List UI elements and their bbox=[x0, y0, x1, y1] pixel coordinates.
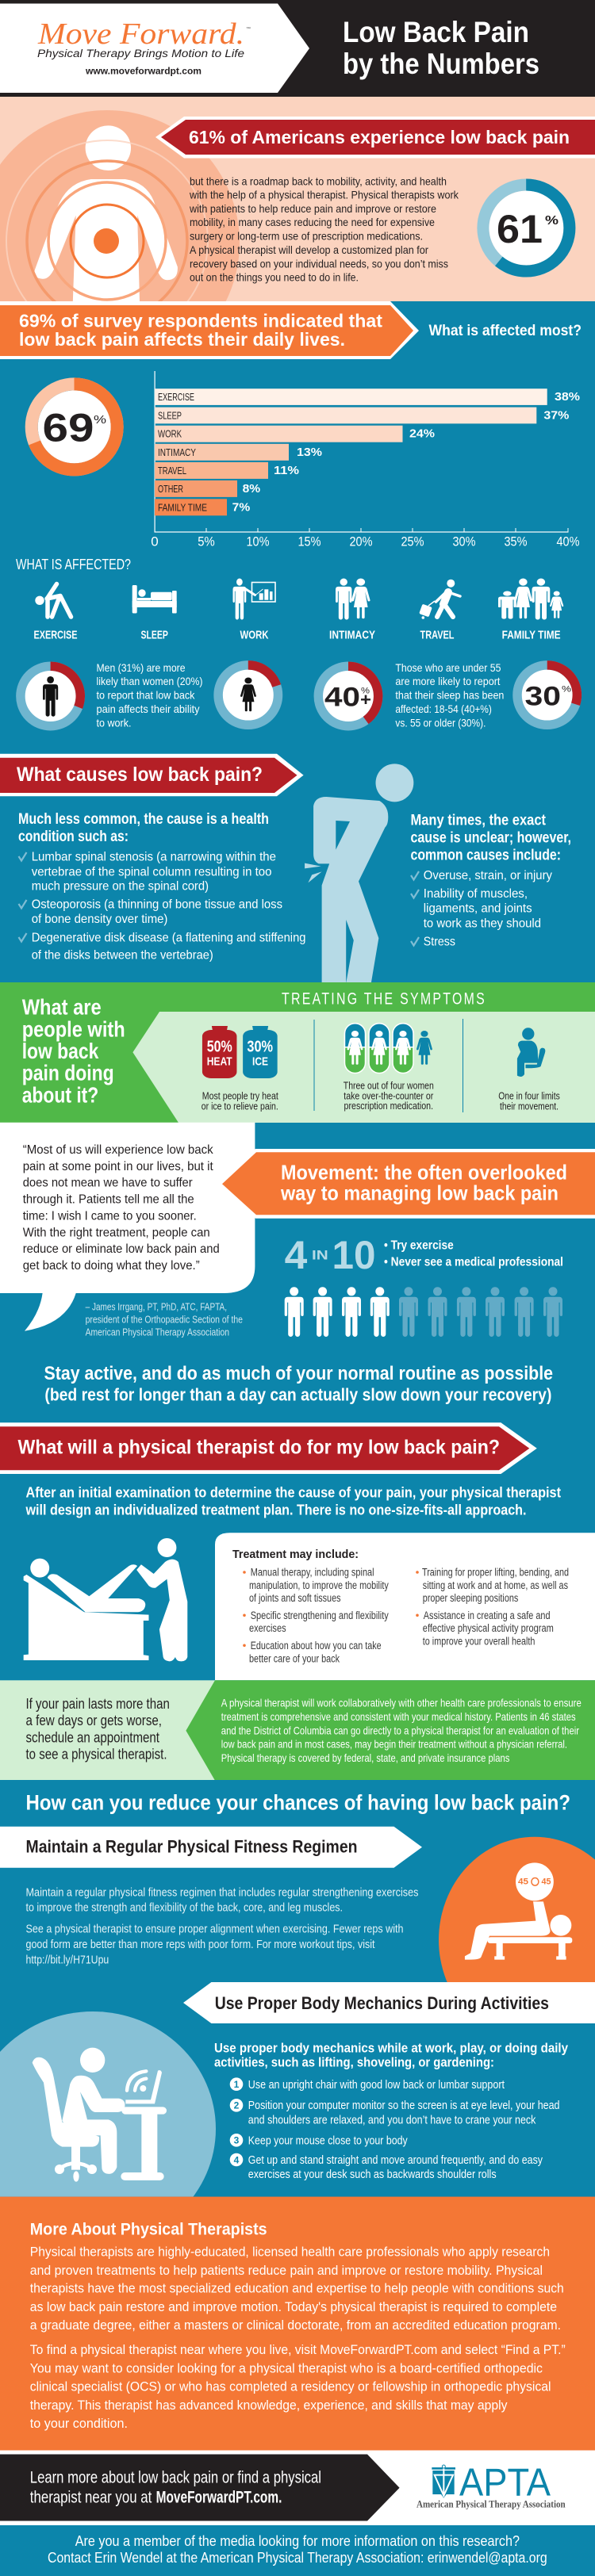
speech bubble bbox=[0, 1123, 255, 1331]
text: men vs women: to work. bbox=[97, 717, 132, 729]
quote text: time: I wish I came to you sooner. bbox=[23, 1209, 197, 1223]
text block: out on the things you need to do in life. bbox=[190, 271, 359, 284]
text: fitness bbox=[25, 1885, 419, 1967]
bar chart: 30% bbox=[452, 534, 476, 549]
footer: Are you a member of the media looking for more information on this research? bbox=[75, 2533, 520, 2549]
heading banner bbox=[217, 1149, 595, 1219]
caption: heat or ice: Most people try heat bbox=[202, 1091, 278, 1102]
icon labels: TRAVEL bbox=[420, 629, 454, 642]
text: age comparison: vs. 55 or older (30%). bbox=[395, 717, 486, 729]
caption: women medication: prescription medication. bbox=[344, 1100, 433, 1112]
text: fitness: See a physical therapist to ensure proper alignment when exercising. Fewer reps with bbox=[25, 1922, 403, 1935]
text: health conditions: much pressure on the spinal cord) bbox=[32, 880, 209, 894]
quote text: “Most of us will experience low back bbox=[23, 1143, 214, 1157]
text: health conditions: Much less common, the cause is a health bbox=[18, 811, 269, 828]
quote text: With the right treatment, people can bbox=[23, 1226, 210, 1239]
icon: bench press: 45 bbox=[518, 1877, 528, 1887]
icon labels: FAMILY TIME bbox=[502, 629, 561, 642]
logo wordmark: Move Forward. bbox=[37, 17, 244, 51]
bar chart: 35% bbox=[505, 534, 527, 549]
text block: therapy. This therapist has advanced knowledge, experience, and skills that may apply bbox=[30, 2398, 508, 2413]
callout: schedule appointment: a few days or gets worse, bbox=[25, 1713, 162, 1728]
text: health conditions: Degenerative disk disease (a flattening and stiffening bbox=[32, 932, 305, 945]
donut chart: 61 percent: % bbox=[545, 214, 559, 228]
text: health conditions: Osteoporosis (a thinning of bone tissue and loss bbox=[32, 898, 282, 912]
icon labels: EXERCISE bbox=[33, 629, 78, 642]
icon labels bbox=[33, 629, 561, 642]
donut: women 20 percent bbox=[218, 665, 278, 725]
text block: and proven treatments to help patients reduce pain and improve or restore mobility. Physical bbox=[30, 2263, 543, 2278]
attribution: president of the Orthopaedic Section of the bbox=[86, 1313, 243, 1325]
caption: heat or ice: or ice to relieve pain. bbox=[202, 1100, 278, 1112]
text block: clinical specialist (OCS) or who has completed a residency or fellowship in orthopedic physical bbox=[30, 2379, 551, 2394]
heading: treating the symptoms: TREATING THE SYMPTOMS bbox=[282, 990, 486, 1009]
text: men vs women: likely than women (20%) bbox=[97, 675, 203, 687]
numbered list: 4 bbox=[234, 2154, 240, 2165]
panel: treatment may include bbox=[215, 1533, 595, 1680]
icon: family time bbox=[498, 579, 563, 619]
title: by the Numbers bbox=[343, 48, 539, 80]
caption: women medication: Three out of four women bbox=[344, 1080, 434, 1091]
icon: work bbox=[233, 579, 275, 619]
icon: travel bbox=[419, 580, 460, 619]
bar chart: 20% bbox=[349, 534, 373, 549]
panel: treatment may include: Assistance in creating a safe and bbox=[424, 1610, 551, 1621]
caption: limits movement: their movement. bbox=[500, 1100, 559, 1112]
callout: schedule appointment: schedule an appointment bbox=[25, 1729, 159, 1745]
panel: treatment may include: to improve your overall health bbox=[423, 1635, 535, 1647]
bar chart: 0 bbox=[151, 534, 159, 549]
heading banner bbox=[155, 117, 595, 159]
bar chart: INTIMACY bbox=[158, 447, 197, 458]
website: www.moveforwardpt.com bbox=[85, 66, 202, 77]
text block: surgery or long-term use of prescription medications. bbox=[190, 230, 423, 243]
icon: heat and ice bottles: HEAT bbox=[207, 1055, 232, 1068]
bar chart: 40% bbox=[557, 534, 579, 549]
statistic: 4 in 10: IN bbox=[312, 1247, 328, 1262]
panel: more about physical therapists bbox=[0, 2197, 595, 2451]
icon: person at desk bbox=[0, 2011, 216, 2196]
bullet list: • Try exercise bbox=[384, 1239, 454, 1253]
APTA logo: American Physical Therapy Association bbox=[416, 2498, 566, 2510]
caption: limits movement bbox=[498, 1091, 560, 1112]
bar chart: 10% bbox=[246, 534, 270, 549]
panel: treatment may include: Treatment may include: bbox=[232, 1548, 359, 1561]
text: age comparison: that their sleep has been bbox=[395, 688, 504, 701]
trademark: ™ bbox=[246, 26, 251, 32]
heading: More About Physical Therapists bbox=[30, 2220, 267, 2239]
donut chart: 61 percent: 61 bbox=[497, 207, 543, 251]
title: Low Back Pain bbox=[343, 16, 529, 48]
advice text bbox=[44, 1363, 553, 1405]
heading banner bbox=[0, 754, 304, 796]
text block: with the help of a physical therapist. Physical therapists work bbox=[189, 189, 459, 201]
bar chart: 11% bbox=[274, 464, 299, 477]
donut chart: 69 percent bbox=[32, 384, 117, 469]
bar chart: TRAVEL bbox=[158, 465, 186, 477]
black arrow: therapist near you at bbox=[30, 2488, 152, 2506]
text block: a graduate degree, either a masters or clinical doctorate, from an accredited education program. bbox=[30, 2318, 561, 2333]
text block: You may want to consider looking for a physical therapist who is a board-certified orthopedic bbox=[30, 2360, 543, 2375]
panel: 61 percent bbox=[0, 97, 595, 301]
quote text: pain at some point in our lives, but it bbox=[23, 1160, 213, 1173]
donut: 40 plus percent: % bbox=[361, 687, 370, 696]
numbered list: 1 bbox=[234, 2079, 240, 2090]
bar chart: 7% bbox=[232, 500, 250, 514]
panel: treatment may include: Manual therapy, including spinal bbox=[251, 1567, 374, 1579]
caption: heat or ice bbox=[202, 1091, 278, 1112]
icon: sleep bbox=[132, 585, 177, 614]
panel: treatment may include: manipulation, to improve the mobility bbox=[249, 1579, 389, 1591]
panel: daily life impact bbox=[0, 301, 582, 729]
heading banner: 69% of survey respondents indicated that bbox=[19, 311, 382, 331]
text block: A physical therapist will develop a customized plan for bbox=[190, 243, 428, 256]
light panel bbox=[132, 1012, 595, 1123]
quote text: does not mean we have to suffer bbox=[23, 1177, 193, 1190]
text: fitness: to improve the strength and flexibility of the back, core, and leg muscles. bbox=[25, 1901, 343, 1915]
text block: as low back pain restore and improve motion. Today's physical therapist is required to complete bbox=[30, 2299, 557, 2314]
panel: what people are doing bbox=[0, 982, 595, 1123]
callout: direct access: Physical therapy is covered by federal, state, and private insurance plans bbox=[221, 1751, 509, 1764]
heading banner bbox=[0, 1422, 537, 1474]
bar chart: SLEEP bbox=[158, 410, 182, 421]
logo panel bbox=[0, 3, 309, 93]
text: body mechanics intro: activities, such as lifting, shoveling, or gardening: bbox=[214, 2055, 494, 2070]
icon: person bent with back pain bbox=[305, 764, 413, 983]
statistic: 4 in 10: 10 bbox=[332, 1233, 376, 1277]
text block: with patients to help reduce pain and improve or restore bbox=[189, 202, 436, 215]
statistic: 4 in 10: 4 bbox=[285, 1233, 308, 1277]
donut chart: 61 percent bbox=[483, 185, 570, 271]
bar chart: 37% bbox=[543, 408, 569, 422]
text block: therapists have the most specialized education and expertise to help people with conditions such bbox=[30, 2281, 564, 2296]
icon: seated person bbox=[517, 1028, 545, 1077]
icon: bench press bbox=[439, 1836, 595, 1982]
numbered list: Keep your mouse close to your body bbox=[248, 2134, 408, 2147]
text: men vs women: Men (31%) are more bbox=[97, 661, 186, 674]
text: health conditions: of the disks between the vertebrae) bbox=[32, 948, 213, 962]
sub-heading banner: body mechanics bbox=[183, 1982, 595, 2023]
bar chart: 5% bbox=[198, 534, 215, 549]
panel: treatment may include: better care of your back bbox=[249, 1652, 340, 1664]
text: fitness: good form are better than more reps with poor form. For more workout tips, visit bbox=[25, 1938, 375, 1951]
donut chart: 69 percent: % bbox=[94, 413, 106, 427]
heading: what are people doing bbox=[22, 994, 125, 1108]
bar chart: 13% bbox=[297, 446, 322, 459]
tagline: Physical Therapy Brings Motion to Life bbox=[37, 48, 244, 59]
panel: quote bbox=[0, 1123, 255, 1338]
icon: body with pain rings bbox=[0, 110, 240, 301]
text: age comparison: Those who are under 55 bbox=[395, 661, 501, 674]
text: age comparison: are more likely to report bbox=[395, 675, 500, 687]
text: fitness: http://bit.ly/H71Upu bbox=[25, 1954, 109, 1967]
text: common causes: to work as they should bbox=[424, 917, 541, 930]
panel: call to action bbox=[0, 2450, 595, 2525]
caption: limits movement: One in four limits bbox=[498, 1091, 560, 1102]
icon labels: INTIMACY bbox=[329, 629, 375, 642]
heading: what are people doing: low back bbox=[22, 1039, 99, 1063]
footer bbox=[48, 2533, 547, 2566]
heading banner: What causes low back pain? bbox=[17, 764, 263, 786]
callout: direct access bbox=[186, 1680, 595, 1780]
heading: what is affected: WHAT IS AFFECTED? bbox=[16, 557, 131, 572]
bar chart: OTHER bbox=[158, 484, 183, 495]
donut chart: 69 percent: 69 bbox=[43, 406, 94, 450]
bar chart: 25% bbox=[401, 534, 424, 549]
panel: movement bbox=[44, 1149, 595, 1405]
numbered list: 3 bbox=[234, 2135, 240, 2146]
numbered list: exercises at your desk such as backwards shoulder rolls bbox=[248, 2168, 497, 2181]
callout: schedule appointment bbox=[0, 1680, 216, 1780]
black arrow bbox=[0, 2455, 400, 2521]
text: health conditions: vertebrae of the spinal column resulting in too bbox=[32, 865, 272, 878]
heading banner: low back pain affects their daily lives. bbox=[19, 329, 345, 350]
text: men vs women bbox=[97, 661, 203, 729]
text block: to your condition. bbox=[30, 2416, 128, 2431]
callout: schedule appointment: to see a physical therapist. bbox=[25, 1747, 167, 1763]
quote text: reduce or eliminate low back pain and bbox=[23, 1242, 220, 1256]
text block: Physical therapists are highly-educated, licensed health care professionals who apply research bbox=[30, 2244, 550, 2260]
text: common causes: Overuse, strain, or injury bbox=[424, 869, 552, 882]
attribution: – James Irrgang, PT, PhD, ATC, FAPTA, bbox=[86, 1300, 227, 1312]
heading banner bbox=[0, 301, 419, 359]
icon: exercise bbox=[35, 584, 71, 617]
heading banner: What will a physical therapist do for my low back pain? bbox=[17, 1436, 500, 1458]
title bbox=[343, 16, 539, 80]
heading banner: way to managing low back pain bbox=[280, 1181, 559, 1204]
intro text: will design an individualized treatment plan. There is no one-size-fits-all approach. bbox=[25, 1502, 526, 1518]
pictogram: 4 of 10 people bbox=[285, 1287, 562, 1337]
numbered list bbox=[230, 2077, 560, 2181]
text: health conditions bbox=[18, 811, 306, 962]
bar chart: 15% bbox=[298, 534, 321, 549]
sub-heading banner: body mechanics: Use Proper Body Mechanics During Activities bbox=[215, 1993, 549, 2013]
text: age comparison bbox=[395, 661, 504, 729]
donut: 30 percent: 30 bbox=[525, 682, 561, 712]
donut: 30 percent bbox=[517, 665, 577, 725]
icon: heat and ice bottles bbox=[202, 1026, 278, 1078]
text: common causes: Stress bbox=[424, 935, 455, 948]
text block bbox=[189, 174, 459, 284]
text: health conditions: condition such as: bbox=[18, 829, 129, 845]
text block: mobility, in many cases reducing the need for expensive bbox=[190, 216, 435, 228]
text: men vs women: pain affects their ability bbox=[97, 702, 200, 715]
panel: what will a physical therapist do bbox=[0, 1422, 595, 1780]
icon labels: WORK bbox=[240, 629, 269, 642]
donut: 40 plus percent: + bbox=[360, 690, 371, 710]
panel: treatment may include: of joints and soft tissues bbox=[249, 1592, 341, 1604]
icon: heat and ice bottles: ICE bbox=[252, 1055, 268, 1068]
text: common causes: common causes include: bbox=[411, 847, 561, 863]
sub-heading banner: fitness: Maintain a Regular Physical Fitness Regimen bbox=[25, 1837, 357, 1857]
caption: women medication bbox=[344, 1080, 434, 1112]
icon: heat and ice bottles: 30% bbox=[247, 1039, 273, 1056]
icon labels: SLEEP bbox=[141, 629, 168, 642]
icon: heat and ice bottles: 50% bbox=[207, 1039, 232, 1056]
bar chart: 8% bbox=[243, 482, 260, 496]
APTA logo bbox=[416, 2462, 566, 2510]
intro text bbox=[25, 1484, 561, 1518]
statistic: 4 in 10 bbox=[285, 1233, 376, 1277]
attribution bbox=[86, 1300, 243, 1338]
icon: intimacy bbox=[336, 579, 370, 619]
numbered list: 2 bbox=[234, 2100, 240, 2111]
callout: schedule appointment: If your pain lasts more than bbox=[25, 1696, 170, 1712]
text: common causes bbox=[411, 813, 571, 948]
panel: treatment may include: effective physical activity program bbox=[423, 1622, 554, 1634]
heading: what are people doing: pain doing bbox=[22, 1061, 114, 1085]
panel: what causes low back pain bbox=[0, 754, 571, 983]
APTA logo: APTA bbox=[459, 2462, 551, 2505]
text: body mechanics intro bbox=[214, 2040, 568, 2070]
text block bbox=[30, 2244, 566, 2431]
icon: three of four women bbox=[344, 1024, 432, 1074]
quote text bbox=[23, 1143, 220, 1273]
bullet list bbox=[384, 1239, 563, 1269]
heading banner: Movement: the often overlooked bbox=[281, 1160, 567, 1184]
quote text: through it. Patients tell me all the bbox=[23, 1193, 194, 1207]
numbered list: Get up and stand straight and move around frequently, and do easy bbox=[248, 2153, 543, 2167]
icon: bench press: 45 bbox=[541, 1877, 551, 1887]
subheading: What is affected most? bbox=[428, 322, 582, 339]
donut: 40 plus percent: 40 bbox=[324, 683, 360, 713]
text: age comparison: affected: 18-54 (40+%) bbox=[395, 702, 492, 715]
bullet list: • Never see a medical professional bbox=[384, 1256, 563, 1269]
caption: women medication: take over-the-counter or bbox=[344, 1090, 433, 1101]
panel: treatment may include: Education about how you can take bbox=[251, 1640, 382, 1652]
bar chart bbox=[151, 371, 580, 549]
heading: what are people doing: about it? bbox=[22, 1083, 98, 1108]
donut: 40 plus percent bbox=[318, 666, 378, 726]
text: common causes: ligaments, and joints bbox=[424, 902, 532, 916]
donut: men 31 percent bbox=[21, 666, 80, 726]
heading banner: 61% of Americans experience low back pain bbox=[189, 127, 570, 147]
panel: reduce your chances bbox=[0, 1791, 595, 2246]
text: men vs women: to report that low back bbox=[97, 688, 195, 701]
panel: treatment may include: proper sleeping positions bbox=[423, 1592, 518, 1604]
text: health conditions: Lumbar spinal stenosis (a narrowing within the bbox=[32, 851, 276, 864]
panel: treatment may include: exercises bbox=[249, 1622, 286, 1634]
bar chart: 38% bbox=[555, 390, 580, 404]
sub-heading banner: fitness bbox=[0, 1827, 422, 1868]
text: common causes: Inability of muscles, bbox=[424, 887, 528, 901]
bar chart: EXERCISE bbox=[158, 392, 194, 403]
attribution: American Physical Therapy Association bbox=[86, 1326, 229, 1338]
emblem bbox=[432, 2465, 455, 2498]
bar chart: 24% bbox=[409, 427, 435, 441]
text: health conditions: of bone density over time) bbox=[32, 913, 167, 926]
donut: 30 percent: % bbox=[562, 684, 571, 694]
header bbox=[0, 0, 595, 97]
numbered list: Use an upright chair with good low back or lumbar support bbox=[248, 2078, 505, 2092]
black arrow: MoveForwardPT.com. bbox=[156, 2488, 282, 2506]
icon: therapist treating patient bbox=[24, 1538, 187, 1661]
bar chart: WORK bbox=[158, 429, 182, 440]
black arrow: Learn more about low back pain or find a physical bbox=[30, 2469, 321, 2487]
bar chart: FAMILY TIME bbox=[158, 502, 207, 513]
text block: To find a physical therapist near where you live, visit MoveForwardPT.com and select “Find a PT.” bbox=[30, 2342, 566, 2357]
text: common causes: Many times, the exact bbox=[411, 813, 547, 829]
heading: what are people doing: What are bbox=[22, 994, 102, 1019]
text block: recovery based on your individual needs, so you don’t miss bbox=[190, 257, 448, 270]
text: fitness: Maintain a regular physical fitness regimen that includes regular strengthening exercises bbox=[25, 1885, 419, 1899]
panel: treatment may include: Specific strengthening and flexibility bbox=[251, 1610, 389, 1621]
heading: what are people doing: people with bbox=[22, 1016, 125, 1041]
numbered list: and shoulders are relaxed, and you don’t have to crane your neck bbox=[248, 2113, 536, 2126]
quote text: get back to doing what they love.” bbox=[23, 1259, 200, 1273]
text block: but there is a roadmap back to mobility, activity, and health bbox=[190, 174, 447, 187]
